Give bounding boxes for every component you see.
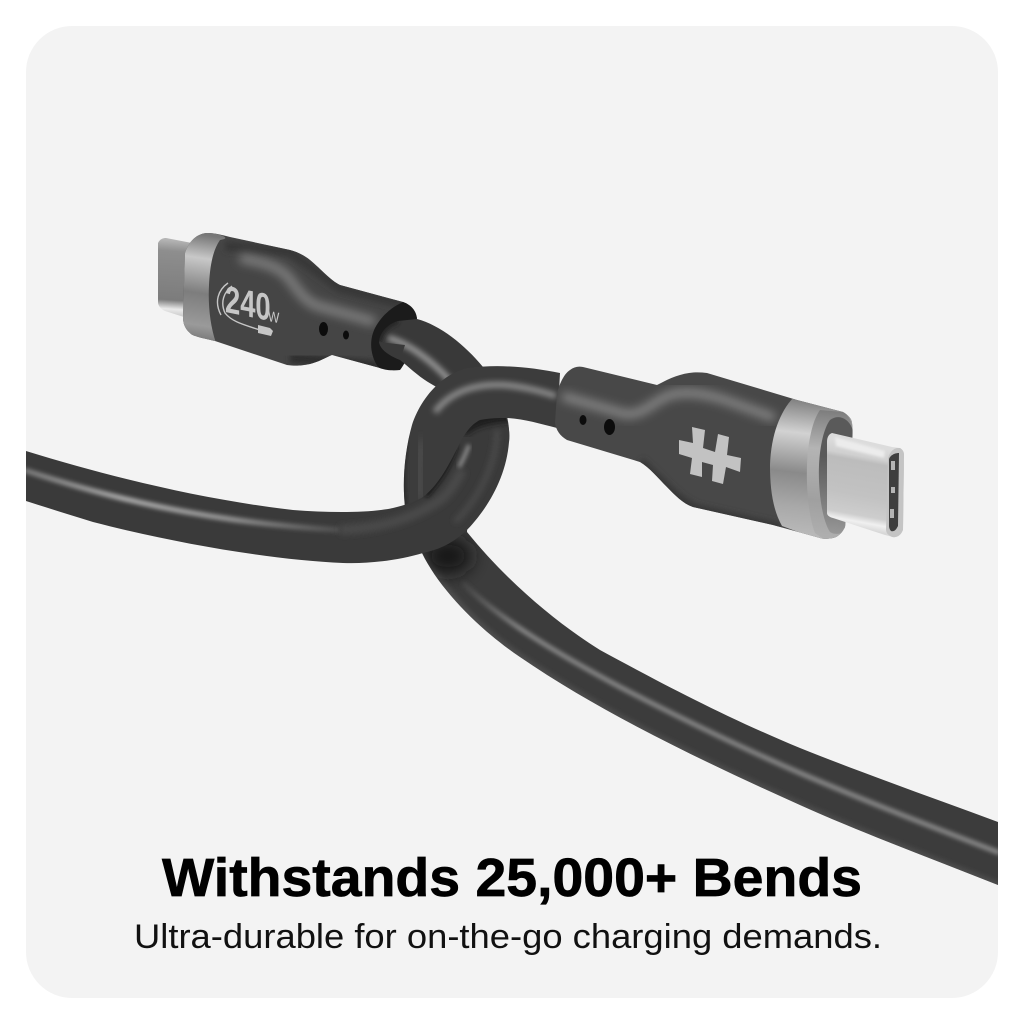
connector body	[555, 367, 853, 539]
metal plug	[827, 433, 904, 537]
240W logo: 240	[225, 279, 271, 330]
connector: USB-C connector with brand logo	[555, 367, 904, 540]
plug top bright strip	[835, 437, 885, 458]
cable: front section of the loop overlapping the lower strand	[24, 416, 515, 563]
vent holes	[319, 322, 328, 336]
inner lip step	[819, 417, 852, 534]
long highlight	[463, 583, 1000, 853]
cable: strand from 240W connector around the loop to the left edge	[379, 319, 509, 442]
subtitle: Ultra-durable for on-the-go charging demands.	[134, 918, 882, 956]
silver band	[770, 398, 860, 540]
silver band	[180, 232, 225, 343]
metal plug tip	[158, 238, 192, 318]
port pins	[890, 461, 895, 518]
port frame	[886, 448, 904, 537]
shadow under the loop	[424, 538, 472, 574]
connector body	[183, 233, 417, 370]
brand logo mark	[679, 427, 741, 484]
vent holes	[580, 415, 586, 425]
cable: strand from USB-C connector around the loop to the lower right	[403, 366, 1000, 886]
title: Withstands 25,000+ Bends	[162, 848, 862, 908]
port opening	[889, 453, 899, 531]
black strain relief collar	[371, 302, 417, 370]
connector: 240W USB-C connector	[158, 232, 417, 370]
240W logo: W	[268, 308, 279, 327]
240W logo	[217, 279, 279, 336]
front lip ring	[807, 410, 853, 540]
